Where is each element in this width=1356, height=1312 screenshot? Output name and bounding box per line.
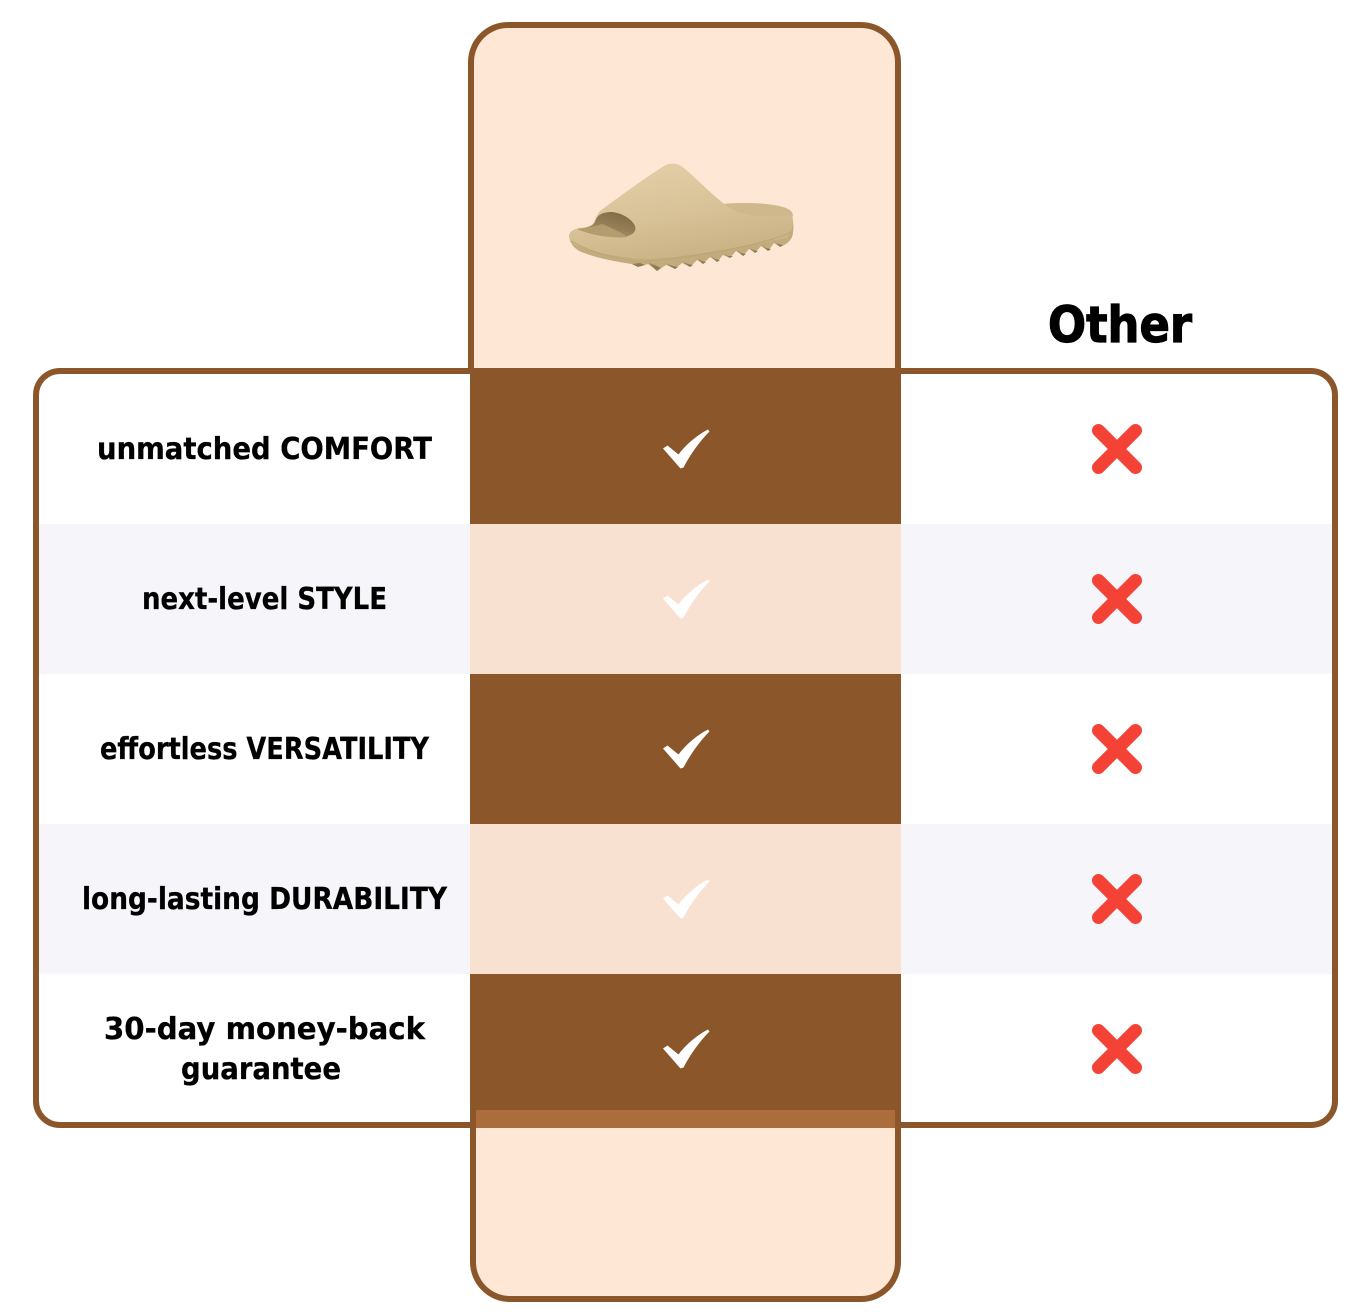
heel footbed [722, 203, 793, 226]
panel: comparison table [36, 371, 1335, 1125]
panel: highlighted column top [468, 22, 901, 368]
label: unmatched COMFORT: unmatched COMFORT [97, 432, 432, 467]
foot opening [577, 212, 635, 237]
icon: beige slide sandal [569, 164, 793, 271]
heading: Other: Other [1048, 296, 1192, 354]
icon: check marks [663, 430, 710, 1068]
row stripe: long-lasting DURABILITY [39, 824, 1332, 974]
icon: cross marks [1098, 430, 1136, 1068]
label: long-lasting DURABILITY: long-lasting DURABILITY [82, 882, 448, 917]
sole with teeth [569, 216, 793, 271]
table base [36, 371, 1335, 1125]
toe footbed [577, 224, 628, 237]
label: effortless VERSATILITY: effortless VERSATILITY [100, 732, 430, 767]
label: 30-day money-back guarantee: 30-day money-back [104, 1012, 426, 1047]
label: 30-day money-back guarantee: guarantee [181, 1052, 341, 1087]
teeth shadows [632, 242, 783, 271]
label: next-level STYLE: next-level STYLE [142, 582, 387, 617]
sole edge line [571, 232, 792, 262]
column cells: highlighted column rows [470, 368, 901, 1128]
panel: highlighted column bottom [470, 1128, 901, 1302]
label: 30-day money-back guarantee [104, 1012, 426, 1087]
upper strap [569, 164, 793, 259]
row stripe: next-level STYLE [39, 524, 1332, 674]
